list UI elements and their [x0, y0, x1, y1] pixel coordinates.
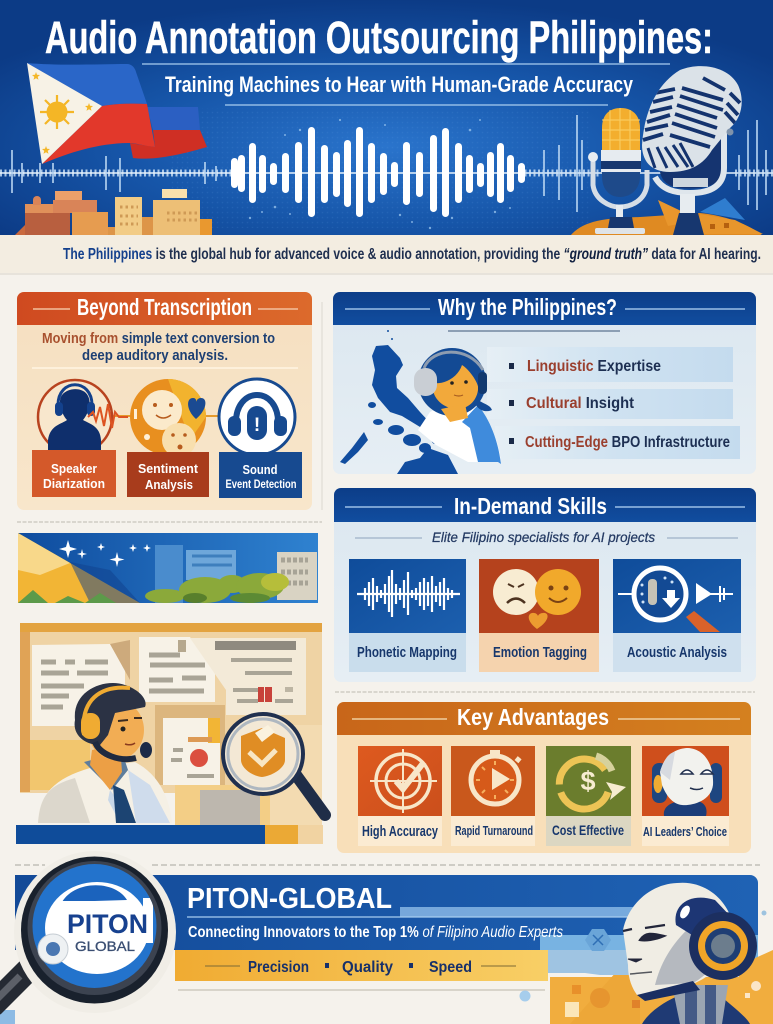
heading: Key Advantages [457, 704, 609, 730]
card: high accuracy: High Accuracy [362, 824, 438, 840]
card: emotion tagging [479, 559, 599, 672]
icon: magnifier logo [0, 851, 176, 1013]
icon: microphones [570, 66, 763, 236]
label: sound event detection: Event Detection [226, 477, 296, 491]
illustration: landscape banner [18, 533, 318, 603]
magnifier with shield [223, 714, 325, 815]
card: acoustic analysis [613, 559, 741, 672]
card: rapid turnaround: Rapid Turnaround [455, 823, 533, 838]
card: ai leaders choice: AI Leaders’ Choice [643, 824, 727, 839]
heading: Beyond Transcription [77, 294, 252, 320]
tagline: Connecting Innovators to the Top 1% of Filipino Audio Experts [188, 924, 563, 941]
label: speaker diarization [32, 450, 116, 497]
icon: sound event detection [219, 379, 295, 455]
colour bar [16, 825, 323, 844]
card: cost effective [546, 746, 631, 846]
card: cost effective: $ [580, 766, 596, 796]
panel: beyond transcription [17, 292, 312, 510]
panel: beyond transcription: deep auditory analysis. [82, 348, 228, 364]
subheading: Elite Filipino specialists for AI projects [432, 529, 655, 545]
subtitle: Training Machines to Hear with Human-Grade Accuracy [165, 72, 634, 97]
card: high accuracy [358, 746, 442, 846]
label: sentiment analysis: Sentiment [138, 461, 199, 476]
icon: philippines map [340, 330, 458, 474]
icon: speaker diarization [38, 380, 128, 454]
label: sound event detection [219, 452, 302, 498]
values strip [175, 950, 548, 981]
panel: in-demand skills [334, 488, 756, 682]
illustration: annotator at work [16, 623, 325, 844]
document left [32, 640, 130, 726]
card: phonetic mapping [349, 559, 466, 672]
card: acoustic analysis: Acoustic Analysis [627, 645, 727, 661]
icon: robot head [623, 883, 757, 1024]
brand name: PITON-GLOBAL [187, 883, 392, 915]
large silver mic [642, 66, 742, 235]
benefit rows [487, 347, 740, 459]
header banner [0, 0, 773, 236]
benefit rows: Cultural Insight [526, 395, 635, 412]
icon: Philippine flag [27, 63, 207, 164]
icon: woman with headset [414, 348, 501, 464]
benefit rows: Linguistic Expertise [527, 358, 661, 375]
label: sentiment analysis [127, 452, 209, 497]
footer: piton-global [0, 851, 773, 1024]
icon: sound event detection: ! [254, 415, 260, 436]
intro text band [0, 235, 773, 274]
label: speaker diarization: Diarization [43, 476, 105, 491]
logo text: PITON [67, 909, 148, 939]
label: sentiment analysis: Analysis [145, 477, 193, 492]
values strip: Quality [342, 959, 393, 976]
label: speaker diarization: Speaker [51, 461, 97, 476]
heading: Why the Philippines? [438, 294, 617, 320]
document right [190, 638, 306, 715]
benefit rows: Cutting-Edge BPO Infrastructure [525, 434, 730, 451]
panel: key advantages [337, 702, 751, 853]
document small [163, 718, 220, 785]
panel: why the philippines [333, 292, 756, 474]
card: emotion tagging: Emotion Tagging [493, 645, 587, 661]
small gold mic [588, 108, 647, 234]
icon: sentiment analysis [130, 379, 206, 457]
card: ai leaders choice [642, 746, 729, 846]
card: phonetic mapping: Phonetic Mapping [357, 645, 457, 661]
label: sound event detection: Sound [242, 462, 278, 477]
values strip: Speed [429, 959, 472, 976]
icon: city skyline [15, 189, 212, 235]
icon: magnifier logo: GLOBAL [75, 938, 135, 954]
description: Moving from simple text conversion to [42, 331, 275, 347]
waveform [0, 115, 773, 229]
card: cost effective: Cost Effective [552, 822, 624, 838]
values strip: Precision [248, 959, 309, 976]
document middle [139, 637, 215, 702]
decorative mosaic [520, 910, 773, 1024]
card: rapid turnaround [451, 746, 535, 846]
person with headset [38, 683, 172, 823]
heading: In-Demand Skills [454, 493, 607, 519]
